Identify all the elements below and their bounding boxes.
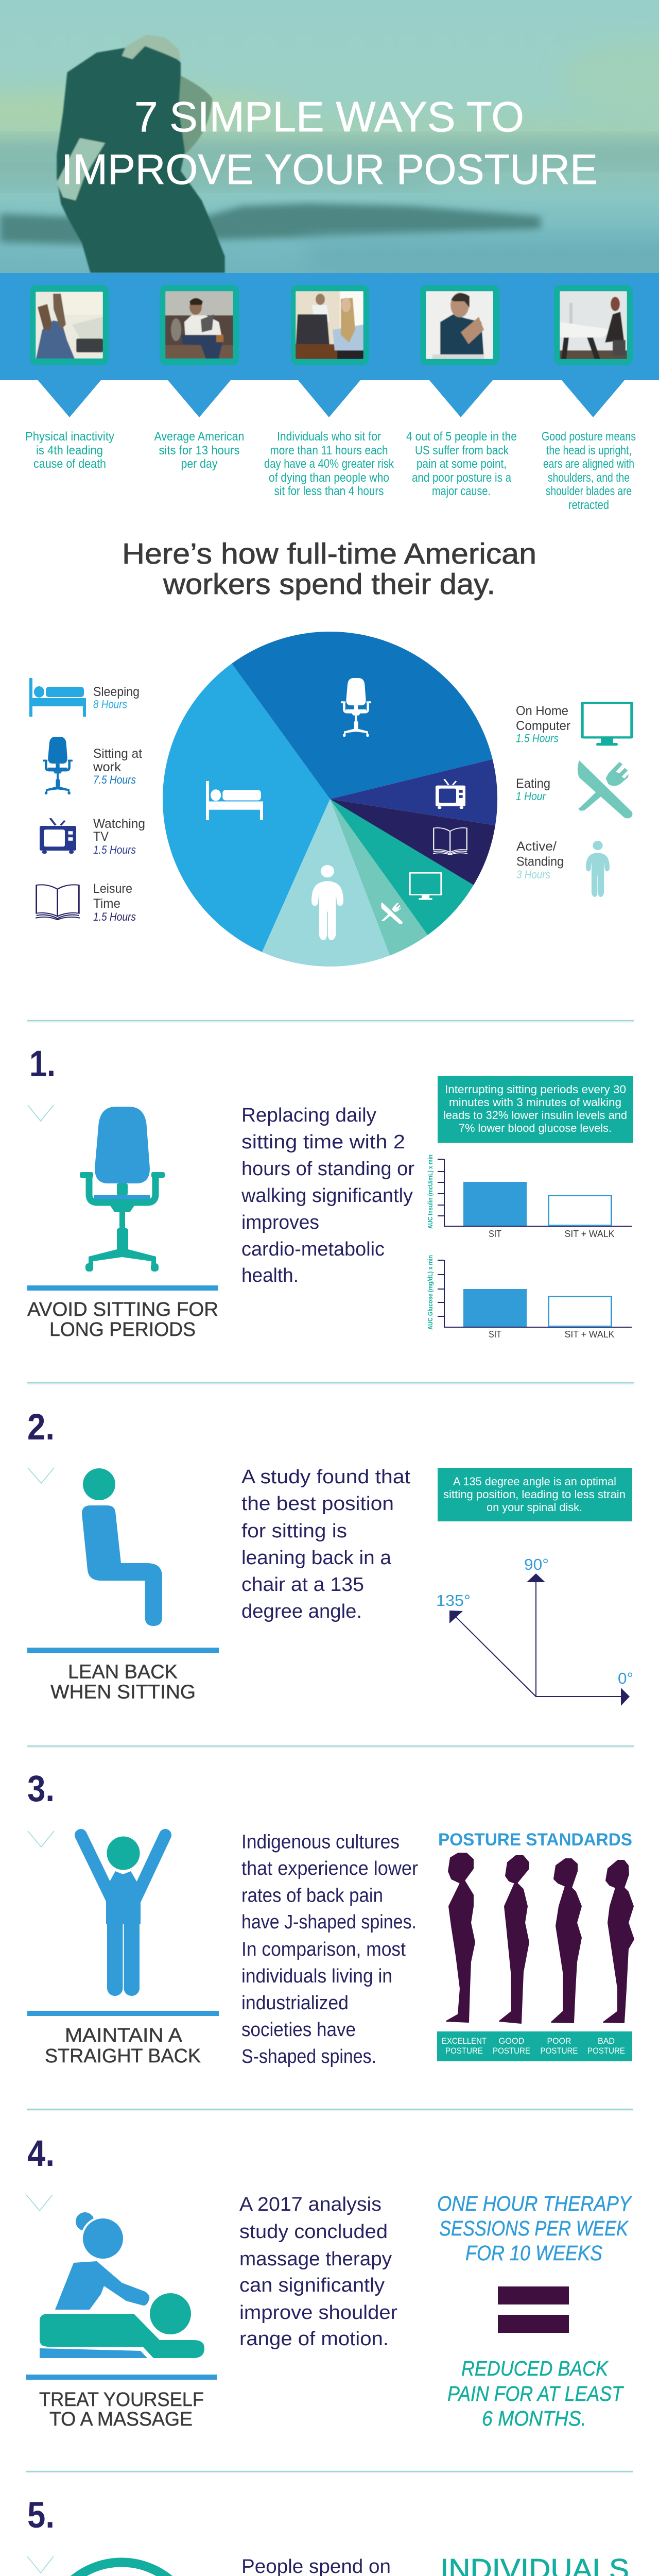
blue band with pointers bbox=[0, 273, 659, 417]
heading: workers spend their day. bbox=[163, 568, 495, 601]
body text: for sitting is bbox=[241, 1520, 347, 1542]
bar chart: insulin bbox=[426, 1155, 632, 1239]
panel: tip 2 lean back bbox=[27, 1407, 633, 1706]
legend: sitting at work bbox=[43, 737, 142, 794]
body text: sitting time with 2 bbox=[241, 1131, 405, 1153]
caption: back pain: pain at some point, bbox=[417, 457, 507, 471]
tip label: WHEN SITTING bbox=[50, 1682, 196, 1703]
caption: good posture: retracted bbox=[568, 498, 609, 512]
caption: eleven hours risk: day have a 40% greater risk bbox=[264, 457, 394, 471]
legend: on home computer: On Home bbox=[516, 704, 568, 718]
legend: watching tv: Watching bbox=[93, 817, 145, 831]
callout: interrupting sitting: leads to 32% lower insulin levels and bbox=[443, 1109, 627, 1122]
panel: tip 5 smartphone bbox=[24, 2495, 632, 2576]
posture labels bar: POSTURE bbox=[493, 2046, 530, 2056]
callout: therapy sessions bbox=[437, 2192, 632, 2265]
bar chart: glucose bbox=[426, 1255, 632, 1340]
legend: sleeping: 8 Hours bbox=[93, 698, 127, 711]
posture labels bar: BAD bbox=[598, 2036, 615, 2046]
tip label: TREAT YOURSELF bbox=[39, 2389, 204, 2411]
photo: woman at standing desk bbox=[554, 285, 633, 365]
caption: eleven hours risk: Individuals who sit for bbox=[277, 430, 381, 444]
caption: eleven hours risk: sit for less than 4 hours bbox=[274, 484, 384, 498]
posture labels bar: POSTURE bbox=[541, 2046, 578, 2056]
caption: good posture: shoulder blades are bbox=[546, 484, 632, 498]
callout: 135 degree angle: sitting position, leading to less strain bbox=[443, 1488, 626, 1501]
legend: eating: Eating bbox=[516, 776, 550, 791]
number 3: 3. bbox=[27, 1769, 55, 1809]
caption: good posture: the head is upright, bbox=[546, 444, 632, 457]
caption: physical inactivity: cause of death bbox=[33, 457, 106, 471]
caption: average american bbox=[154, 430, 244, 471]
equals sign bbox=[498, 2286, 569, 2333]
legend: leisure time: 1.5 Hours bbox=[93, 910, 136, 923]
tip label bbox=[27, 1285, 218, 1341]
caption: good posture: Good posture means bbox=[542, 430, 636, 444]
caption: back pain: US suffer from back bbox=[415, 444, 509, 457]
body text: study concluded bbox=[239, 2221, 388, 2243]
body text: health. bbox=[241, 1265, 299, 1286]
body text: A study found that bbox=[241, 1466, 410, 1488]
panel: tip 4 massage bbox=[26, 2133, 632, 2430]
posture labels bar: GOOD bbox=[498, 2036, 524, 2046]
legend: sleeping: Sleeping bbox=[93, 685, 140, 699]
body text: walking significantly bbox=[241, 1185, 413, 1207]
panel: hero banner bbox=[0, 0, 659, 273]
body text: Replacing daily bbox=[241, 1105, 376, 1126]
caption: physical inactivity: Physical inactivity bbox=[25, 430, 114, 444]
bar chart: glucose: SIT + WALK bbox=[564, 1329, 615, 1340]
chevron bbox=[28, 1105, 54, 1121]
body text: cardio-metabolic bbox=[241, 1239, 385, 1260]
bar chart: glucose: SIT bbox=[489, 1329, 501, 1340]
photo: feet on desk bbox=[30, 285, 109, 365]
legend: sitting at work: Sitting at bbox=[93, 747, 142, 761]
caption: back pain: 4 out of 5 people in the bbox=[406, 430, 517, 444]
body text: Indigenous cultures bbox=[241, 1831, 400, 1853]
body text: leaning back in a bbox=[241, 1547, 392, 1569]
angle diagram: 135° bbox=[436, 1591, 471, 1609]
icon: utensils on pie bbox=[381, 902, 403, 924]
posture labels bar bbox=[437, 2031, 632, 2061]
bar chart: glucose: AUC Glucose (mg/dL) x min bbox=[426, 1255, 434, 1330]
callout: 135 degree angle: A 135 degree angle is an optimal bbox=[453, 1475, 616, 1488]
panel: tip 3 straight back bbox=[27, 1769, 634, 2067]
body text: A 2017 analysis bbox=[239, 2194, 381, 2215]
legend: eating: 1 Hour bbox=[516, 790, 546, 803]
legend: watching tv: TV bbox=[93, 829, 109, 844]
title bbox=[65, 101, 596, 184]
number 5: 5. bbox=[27, 2495, 55, 2536]
title: 7 SIMPLE WAYS TO bbox=[134, 93, 524, 141]
icon: bed on pie bbox=[206, 781, 263, 820]
caption: eleven hours risk: of dying than people who bbox=[269, 471, 389, 485]
legend: leisure time: Leisure bbox=[93, 882, 132, 896]
callout: reduced back pain: 6 MONTHS. bbox=[482, 2406, 586, 2430]
callout: reduced back pain: REDUCED BACK bbox=[461, 2357, 609, 2380]
legend: eating bbox=[516, 760, 632, 818]
tip label: STRAIGHT BACK bbox=[45, 2045, 201, 2067]
callout: reduced back pain: PAIN FOR AT LEAST bbox=[447, 2382, 625, 2405]
caption: average american: Average American bbox=[154, 430, 244, 444]
icon: figure with raised arms bbox=[81, 1835, 165, 1996]
bar chart: insulin: AUC Insulin (mcU/mL) x min bbox=[426, 1155, 434, 1229]
panel: statistics band with photos bbox=[0, 273, 659, 512]
angle diagram bbox=[436, 1555, 633, 1706]
callout: reduced back pain bbox=[447, 2357, 625, 2430]
callout: interrupting sitting bbox=[438, 1076, 633, 1143]
caption: back pain bbox=[406, 430, 517, 498]
callout: interrupting sitting: minutes with 3 minutes of walking bbox=[449, 1096, 621, 1109]
photo: office workers bbox=[291, 285, 369, 365]
caption: good posture bbox=[542, 430, 636, 512]
chevron bbox=[26, 2195, 53, 2211]
caption: back pain: and poor posture is a bbox=[412, 471, 512, 485]
icon: tv on pie bbox=[436, 779, 465, 809]
posture silhouettes bbox=[446, 1853, 634, 2023]
body text: In comparison, most bbox=[241, 1939, 406, 1960]
legend: active standing: 3 Hours bbox=[516, 868, 550, 881]
body text: improve shoulder bbox=[239, 2302, 397, 2324]
body text bbox=[241, 1831, 418, 2067]
caption: good posture: ears are aligned with bbox=[543, 457, 634, 471]
tip label: LEAN BACK bbox=[68, 1661, 178, 1683]
body text bbox=[241, 1105, 414, 1286]
body text: rates of back pain bbox=[241, 1885, 383, 1906]
caption: eleven hours risk: more than 11 hours each bbox=[270, 444, 388, 457]
photo: man with shoulder pain bbox=[420, 285, 499, 365]
icon: person on pie bbox=[311, 865, 343, 940]
pie chart bbox=[163, 632, 497, 967]
tip label: MAINTAIN A bbox=[65, 2025, 183, 2046]
icon: office chair bbox=[80, 1107, 165, 1272]
bar chart: insulin: SIT + WALK bbox=[564, 1229, 615, 1239]
icon: no smartphone bbox=[46, 2563, 197, 2576]
body text: have J-shaped spines. bbox=[241, 1911, 417, 1933]
legend: active standing: Active/ bbox=[516, 839, 557, 854]
tip label bbox=[27, 2011, 219, 2067]
legend: watching tv bbox=[40, 817, 145, 856]
callout: interrupting sitting: 7% lower blood glucose levels. bbox=[459, 1122, 612, 1134]
legend: watching tv: 1.5 Hours bbox=[93, 843, 136, 856]
tip label: LONG PERIODS bbox=[49, 1319, 196, 1341]
body text bbox=[239, 2194, 397, 2350]
legend: sitting at work: work bbox=[93, 760, 121, 774]
legend: active standing: Standing bbox=[516, 854, 564, 869]
callout: 135 degree angle bbox=[438, 1468, 632, 1521]
tip label bbox=[27, 1648, 219, 1703]
callout: therapy sessions: SESSIONS PER WEEK bbox=[439, 2216, 629, 2240]
caption: physical inactivity: is 4th leading bbox=[36, 444, 103, 457]
legend: on home computer: 1.5 Hours bbox=[516, 732, 559, 745]
body text: industrialized bbox=[241, 1992, 349, 2014]
icon: chair on pie bbox=[341, 678, 371, 737]
body text: improves bbox=[241, 1212, 319, 1233]
body text: societies have bbox=[241, 2019, 356, 2041]
body text: degree angle. bbox=[241, 1601, 362, 1622]
body text: individuals living in bbox=[241, 1965, 392, 1987]
body text: chair at a 135 bbox=[241, 1574, 364, 1596]
icon: seated figure bbox=[82, 1468, 162, 1626]
icon: book on pie bbox=[433, 828, 467, 855]
hero stretching figure bbox=[57, 35, 225, 273]
chevron bbox=[28, 1468, 54, 1483]
legend: leisure time bbox=[36, 882, 136, 923]
bar chart: insulin: SIT bbox=[489, 1229, 501, 1239]
posture labels bar: POSTURE bbox=[587, 2046, 625, 2056]
caption: back pain: major cause. bbox=[432, 484, 491, 498]
title: IMPROVE YOUR POSTURE bbox=[61, 145, 598, 193]
chevron bbox=[28, 1831, 54, 1847]
body text: massage therapy bbox=[239, 2248, 392, 2270]
photo: man on sofa bbox=[160, 285, 239, 365]
number 1: 1. bbox=[29, 1044, 56, 1084]
body text: can significantly bbox=[239, 2275, 385, 2296]
tip label: AVOID SITTING FOR bbox=[27, 1299, 218, 1320]
caption: physical inactivity bbox=[25, 430, 114, 471]
caption: average american: sits for 13 hours bbox=[159, 444, 240, 457]
legend: on home computer: Computer bbox=[516, 719, 570, 733]
number 2: 2. bbox=[27, 1407, 55, 1448]
body text: the best position bbox=[241, 1493, 394, 1515]
caption: average american: per day bbox=[181, 457, 217, 471]
angle diagram: 0° bbox=[618, 1669, 633, 1687]
posture standards heading: POSTURE STANDARDS bbox=[438, 1830, 632, 1850]
tip label bbox=[26, 2375, 217, 2430]
posture labels bar: POOR bbox=[547, 2036, 571, 2046]
heading: Here’s how full-time American bbox=[122, 537, 536, 570]
legend: active standing bbox=[516, 839, 610, 897]
callout: interrupting sitting: Interrupting sitting periods every 30 bbox=[445, 1083, 626, 1096]
caption: good posture: shoulders, and the bbox=[548, 471, 630, 485]
body text: range of motion. bbox=[239, 2328, 389, 2350]
posture labels bar: POSTURE bbox=[445, 2046, 483, 2056]
legend: sleeping bbox=[29, 678, 140, 717]
body text: hours of standing or bbox=[241, 1158, 414, 1180]
callout: therapy sessions: ONE HOUR THERAPY bbox=[437, 2192, 632, 2215]
panel: tip 1 avoid sitting bbox=[27, 1044, 633, 1341]
heading bbox=[122, 537, 536, 601]
icon: computer on pie bbox=[409, 872, 442, 900]
posture labels bar: EXCELLENT bbox=[442, 2036, 487, 2046]
tip label: TO A MASSAGE bbox=[49, 2409, 193, 2430]
callout: 135 degree angle: on your spinal disk. bbox=[487, 1501, 582, 1514]
legend: sitting at work: 7.5 Hours bbox=[93, 773, 136, 786]
angle diagram: 90° bbox=[524, 1555, 549, 1573]
body text: S-shaped spines. bbox=[241, 2046, 376, 2067]
panel: how workers spend their day bbox=[29, 537, 633, 967]
legend: leisure time: Time bbox=[93, 896, 120, 911]
legend: on home computer bbox=[516, 702, 633, 745]
body text bbox=[241, 1466, 410, 1622]
number 4: 4. bbox=[27, 2133, 55, 2174]
callout: therapy sessions: FOR 10 WEEKS bbox=[465, 2241, 602, 2265]
chevron bbox=[27, 2556, 54, 2573]
icon: massage bbox=[40, 2212, 204, 2358]
hero background photo bbox=[0, 0, 659, 273]
body text: that experience lower bbox=[241, 1858, 418, 1879]
caption: eleven hours risk bbox=[264, 430, 394, 498]
